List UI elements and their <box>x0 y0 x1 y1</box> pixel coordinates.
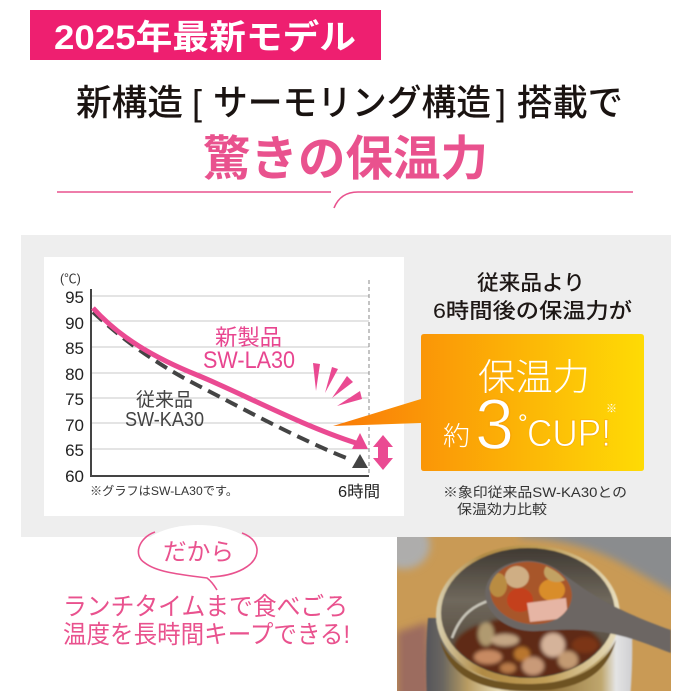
y axis labels: 95 <box>65 288 84 307</box>
label: new model: 新製品 <box>215 325 282 350</box>
heading: new structure: [ <box>192 82 202 123</box>
marker: new model triangle <box>352 433 368 449</box>
text: keeps temperature until lunch: 温度を長時間キープできる! <box>63 621 350 649</box>
label: old model: 従来品 <box>136 389 193 411</box>
y axis labels: 80 <box>65 365 84 384</box>
heading: new structure: 搭載で <box>517 82 623 123</box>
heading underline <box>57 192 633 208</box>
speech bubble: therefore: だから <box>163 539 234 566</box>
chart grid lines <box>91 296 369 449</box>
photo: soup jar with spoon <box>397 537 671 691</box>
heading: new structure: 新構造 <box>76 82 183 123</box>
speech bubble: therefore <box>138 525 257 590</box>
callout: 3 degrees up: ※ <box>606 403 617 415</box>
text: compared with old model: 6時間後の保温力が <box>433 300 632 323</box>
badge: 2025 latest model: 2025年最新モデル <box>54 18 356 57</box>
callout: 3 degrees up: CUP! <box>527 413 611 455</box>
jar body <box>426 618 632 691</box>
chart footnote: ※グラフはSW-LA30です。 <box>90 484 238 498</box>
y axis unit: (℃) <box>60 272 81 286</box>
callout: 3 degrees up: 3 <box>475 386 514 465</box>
text: keeps temperature until lunch <box>63 593 350 649</box>
label: new model <box>203 325 295 374</box>
label: old model: SW-KA30 <box>125 409 204 431</box>
text: compared with old model: 従来品より <box>477 272 585 295</box>
x axis label: 6時間 <box>338 483 380 501</box>
line: new model <box>93 308 356 443</box>
footnote: comparison: 保温効力比較 <box>457 502 548 517</box>
marker: old model triangle <box>352 454 368 468</box>
y axis labels: 70 <box>65 416 84 435</box>
y axis labels: 75 <box>65 390 84 409</box>
emphasis marks <box>313 363 362 406</box>
label: old model <box>125 389 204 431</box>
callout: 3 degrees up: 約 <box>443 421 470 451</box>
callout: 3 degrees up: 保温力 <box>478 357 590 398</box>
chart right dashed marker <box>368 280 370 476</box>
footnote: comparison: ※象印従来品SW-KA30との <box>443 485 627 500</box>
soup <box>454 617 602 679</box>
jar rim <box>436 545 620 685</box>
double arrow: temperature gap <box>373 435 393 470</box>
label: new model: SW-LA30 <box>203 347 295 374</box>
panel: chart <box>44 257 404 516</box>
heading: new structure <box>76 82 623 123</box>
line: old model dashed <box>93 312 349 459</box>
text: keeps temperature until lunch: ランチタイムまで食べごろ <box>63 593 348 621</box>
y axis labels: 90 <box>65 314 84 333</box>
panel: gray background <box>21 235 671 537</box>
spoon <box>540 572 671 653</box>
heading: new structure: ] <box>496 82 506 123</box>
footnote: comparison <box>443 485 627 517</box>
heading: new structure: サーモリング構造 <box>213 82 491 123</box>
heading: amazing heat retention: 驚きの保温力 <box>203 133 488 186</box>
callout: 3 degrees up: ° <box>518 410 528 437</box>
badge: 2025 latest model <box>30 10 381 60</box>
text: compared with old model <box>433 272 632 323</box>
callout: 3 degrees up <box>333 334 644 471</box>
chart axes <box>91 289 369 476</box>
y axis labels <box>65 288 84 486</box>
y axis labels: 60 <box>65 467 84 486</box>
y axis labels: 65 <box>65 441 84 460</box>
y axis labels: 85 <box>65 339 84 358</box>
